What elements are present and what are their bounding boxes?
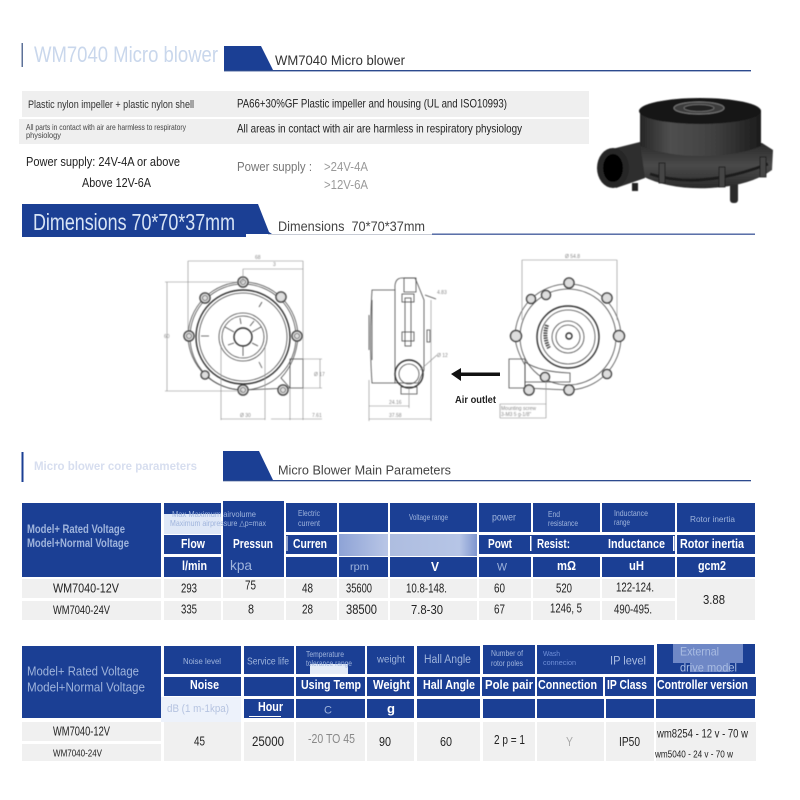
chart: side view technical drawing [369, 278, 448, 421]
chart: front view technical drawing: 60 [164, 334, 170, 340]
panel: material and power specifications: Power supply: 24V-4A or above [26, 154, 180, 169]
heading: Micro blower core parameters: Micro blower core parameters [34, 461, 197, 473]
table: core parameters, part one: range [614, 517, 630, 527]
table: core parameters, part one: power [492, 512, 517, 524]
table: core parameters, part two [22, 644, 756, 761]
chart: front view technical drawing: Ø 17 [314, 372, 325, 378]
table: core parameters, part one: Curren [293, 537, 327, 551]
chart: front view technical drawing: 3 [273, 262, 276, 268]
heading: Micro blower core parameters: Micro Blower Main Parameters [278, 464, 451, 478]
table: core parameters, part one: gcm2 [698, 559, 726, 573]
table: core parameters, part two: IP level [610, 654, 646, 668]
table: core parameters, part two: Temperature [306, 649, 344, 659]
heading: WM7040 Micro blower: WM7040 Micro blower [275, 52, 405, 68]
chart: rear view technical drawing [500, 254, 624, 418]
heading: Micro blower core parameters [22, 451, 751, 482]
table: core parameters, part two: Using Temp [301, 678, 361, 692]
table: core parameters, part two: 90 [379, 734, 391, 749]
table: core parameters, part one: 75 [245, 578, 256, 592]
panel: material and power specifications: All parts in contact with air are harmless to respiratory [26, 122, 187, 132]
table: core parameters, part one: Powt [488, 537, 513, 551]
table: core parameters, part two: Model+Normal Voltage [27, 680, 145, 694]
table: core parameters, part two: IP50 [619, 734, 640, 749]
table: core parameters, part one: Rotor inertia [680, 537, 745, 551]
chart: front view technical drawing: 7.61 [312, 413, 322, 419]
table: core parameters, part two: Service life [247, 656, 289, 668]
table: core parameters, part one: resistance [548, 518, 578, 528]
table: core parameters, part one: Pressun [233, 537, 273, 551]
table: core parameters, part two: weight [376, 654, 405, 666]
table: core parameters, part two: Noise [190, 678, 219, 692]
table: core parameters, part two: Weight [373, 678, 411, 692]
heading: WM7040 Micro blower [22, 42, 751, 71]
table: core parameters, part two: -20 TO 45 [308, 732, 355, 746]
table: core parameters, part one: 293 [181, 582, 197, 596]
table: core parameters, part one: 7.8-30 [411, 602, 443, 617]
chart: side view technical drawing: 4.83 [437, 290, 447, 296]
panel: material and power specifications: Power supply : [237, 159, 312, 174]
table: core parameters, part one: WM7040-24V [53, 605, 110, 617]
table: core parameters, part one: Maximum airpressure △p=max [170, 518, 267, 528]
heading: Dimensions 70*70*37mm: Dimensions 70*70*37mm [278, 218, 425, 234]
chart: rear view technical drawing: Mounting screw [501, 406, 536, 412]
table: core parameters, part one: 3.88 [703, 592, 725, 607]
table: core parameters, part two: 25000 [252, 734, 284, 749]
table: core parameters, part one: 48 [302, 582, 313, 596]
panel: material and power specifications: PA66+30%GF Plastic impeller and housing (UL and ISO10993) [237, 96, 507, 110]
table: core parameters, part one: kpa [230, 557, 252, 573]
table: core parameters, part one: Rotor inertia [690, 514, 735, 524]
table: core parameters, part one: Inductance [608, 537, 665, 551]
table: core parameters, part two: WM7040-12V [53, 724, 110, 738]
table: core parameters, part one: uH [629, 559, 644, 573]
table: core parameters, part one: 335 [181, 602, 197, 616]
table: core parameters, part two: tolerance range [306, 658, 352, 668]
table: core parameters, part two: External [680, 644, 719, 658]
heading: Dimensions 70*70*37mm [22, 204, 755, 237]
table: core parameters, part two: Wash [543, 649, 560, 658]
table: core parameters, part one: 38500 [346, 602, 377, 617]
table: core parameters, part two: drive model [680, 660, 737, 674]
table: core parameters, part two: 45 [194, 734, 205, 748]
chart: side view technical drawing: 24.16 [389, 400, 402, 406]
table: core parameters, part one: rpm [350, 561, 369, 573]
table: core parameters, part one: 122-124. [616, 580, 654, 594]
table: core parameters, part two: Hour [258, 700, 283, 714]
table: core parameters, part one: 60 [494, 582, 505, 596]
table: core parameters, part one: V [431, 560, 440, 574]
icon: black blower product photo [597, 98, 773, 203]
table: core parameters, part one: 10.8-148. [406, 582, 447, 596]
table: core parameters, part two: Model+ Rated Voltage [27, 664, 139, 678]
panel: material and power specifications: Plastic nylon impeller + plastic nylon shell [28, 99, 194, 111]
table body: data rows [22, 722, 756, 761]
table: core parameters, part two: 60 [440, 734, 452, 749]
chart: front view technical drawing [164, 255, 325, 420]
table: core parameters, part one: Max Maximum airvolume [172, 509, 256, 519]
table: core parameters, part two: C [324, 704, 332, 716]
table header: blue cells [22, 501, 755, 577]
table: core parameters, part one: Model+ Rated Voltage [27, 524, 125, 536]
table: core parameters, part one: Electric [298, 508, 321, 518]
table: core parameters, part one: W [497, 562, 508, 574]
table: core parameters, part one: l/min [182, 559, 207, 573]
table header: blue cells [22, 644, 756, 718]
table: core parameters, part one: Model+Normal Voltage [27, 538, 129, 550]
chart: front view technical drawing: 68 [255, 255, 261, 261]
table: core parameters, part two: connecion [543, 658, 576, 667]
table: core parameters, part two: Number of [491, 648, 524, 658]
table: core parameters, part one: Flow [181, 537, 205, 551]
table: core parameters, part two: g [387, 702, 395, 716]
table: core parameters, part two: Y [566, 734, 573, 749]
table: core parameters, part two: Noise level [183, 656, 221, 666]
table: core parameters, part two: Hall Angle [424, 654, 471, 666]
table: core parameters, part two: Pole pair [485, 678, 533, 692]
table: core parameters, part one: 8 [248, 602, 254, 616]
panel: material and power specifications: All areas in contact with air are harmless in respiratory physiology [237, 122, 522, 136]
table: core parameters, part one: Resist: [537, 537, 570, 551]
chart: rear view technical drawing: Ø 54.8 [565, 254, 580, 260]
table: core parameters, part one: 28 [302, 602, 313, 616]
panel: material and power specifications: >12V-6A [324, 178, 369, 192]
table: core parameters, part two: wm8254 - 12 v - 70 w [656, 728, 749, 740]
table: core parameters, part two: wm5040 - 24 v - 70 w [654, 750, 734, 760]
table: core parameters, part one: 520 [556, 582, 572, 596]
chart: side view technical drawing: 37.58 [389, 413, 402, 419]
table: core parameters, part two: WM7040-24V [53, 748, 102, 760]
panel: material and power specifications [19, 91, 589, 192]
table: core parameters, part two: Hall Angle [423, 678, 475, 692]
arrow: air outlet direction [451, 368, 500, 381]
table: core parameters, part two: IP Class [607, 678, 647, 692]
table: core parameters, part one: Voltage range [409, 512, 448, 522]
heading: WM7040 Micro blower: WM7040 Micro blower [34, 42, 218, 67]
table: core parameters, part one: Inductance [614, 508, 648, 518]
panel: material and power specifications: >24V-4A [324, 160, 369, 174]
panel: material and power specifications: Above 12V-6A [82, 175, 151, 190]
table: core parameters, part one: mΩ [557, 559, 576, 573]
table: core parameters, part one: End [548, 509, 560, 519]
table: core parameters, part one: 35600 [346, 582, 372, 596]
table: core parameters, part one: current [298, 518, 321, 528]
chart: side view technical drawing: Ø 12 [437, 353, 448, 359]
table: core parameters, part two: Connection [538, 678, 597, 692]
table: core parameters, part one: 490-495. [614, 602, 652, 616]
panel: material and power specifications: physiology [26, 130, 62, 140]
table: core parameters, part one: WM7040-12V [53, 582, 120, 596]
label: Air outlet: Air outlet [455, 394, 496, 406]
table: core parameters, part two: dB (1 m-1kpa) [167, 703, 229, 715]
heading: Dimensions 70*70*37mm: Dimensions 70*70*37mm [33, 209, 235, 235]
table: core parameters, part one: 1246, 5 [550, 602, 582, 616]
table: core parameters, part one: 67 [494, 602, 505, 616]
chart: front view technical drawing: Ø 30 [240, 413, 251, 419]
table: core parameters, part one [22, 501, 755, 620]
table: core parameters, part two: 2 p = 1 [494, 732, 525, 747]
table: core parameters, part two: Controller version [657, 678, 748, 692]
table body: data rows [22, 579, 755, 620]
table: core parameters, part two: rotor poles [491, 658, 523, 668]
chart: rear view technical drawing: 3-M3 5 g-1/8" [501, 412, 531, 418]
